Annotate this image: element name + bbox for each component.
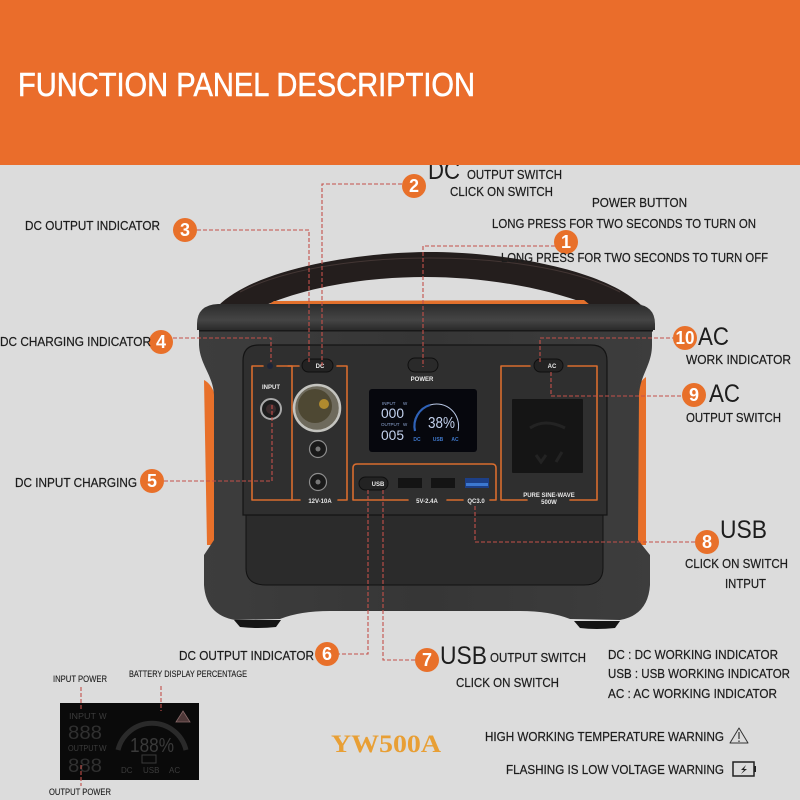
- LCD diagram segments: [68, 711, 190, 777]
- callout 9: AC output switch: OUTPUT SWITCH: [686, 411, 781, 425]
- LCD display: USB: [433, 437, 444, 443]
- callout 4: DC charging indicator: [0, 330, 173, 354]
- LCD diagram: [49, 669, 247, 798]
- USB switch: [359, 477, 388, 490]
- callout 1: power button: [492, 196, 768, 265]
- callout 8: USB click on switch: [685, 516, 788, 591]
- low voltage warning: FLASHING IS LOW VOLTAGE WARNING: [506, 763, 724, 777]
- callout 5: DC input charging: DC INPUT CHARGING: [15, 476, 137, 490]
- callout 1: power button: LONG PRESS FOR TWO SECONDS TO TURN ON: [492, 217, 756, 231]
- callout 6: DC output indicator: [179, 642, 339, 666]
- power button: POWER: [411, 377, 434, 383]
- orange side bumpers: [204, 377, 646, 545]
- callout 8: USB click on switch: 8: [702, 532, 712, 552]
- orange port outlines: [252, 366, 597, 500]
- DC round ports: 12V-10A: [308, 499, 332, 505]
- DC round ports: [308, 440, 332, 505]
- callout 1: power button: POWER BUTTON: [592, 196, 687, 210]
- LCD display: OUTPUT: [381, 422, 400, 427]
- upper control panel: [243, 345, 607, 515]
- callout 1: power button: 1: [561, 232, 571, 252]
- callout 6: DC output indicator: 6: [322, 644, 332, 664]
- callout 5: DC input charging: [15, 469, 164, 493]
- LCD display: INPUT: [382, 401, 396, 406]
- USB ports: [398, 478, 489, 505]
- LCD display: [369, 389, 477, 452]
- working indicator legend: DC : DC WORKING INDICATOR: [608, 648, 778, 662]
- top cap: [197, 304, 655, 330]
- callout 8: USB click on switch: USB: [720, 516, 767, 544]
- USB ports: 5V-2.4A: [416, 499, 439, 505]
- input indicator and port: [261, 363, 281, 419]
- callout 7: USB output switch: OUTPUT SWITCH: [490, 651, 586, 665]
- LCD diagram segments: 888: [68, 756, 102, 777]
- LCD diagram labels: INPUT POWER: [53, 674, 107, 685]
- lower blank panel: [246, 515, 603, 585]
- LCD diagram segments: AC: [169, 766, 180, 775]
- LCD diagram segments: W: [99, 712, 107, 721]
- callout 7: USB output switch: 7: [422, 650, 432, 670]
- body shell: [199, 320, 652, 620]
- LCD display: 38%: [428, 415, 455, 432]
- callout 2: DC output switch: [402, 168, 562, 199]
- callout 9: AC output switch: [682, 380, 781, 425]
- high temperature warning: HIGH WORKING TEMPERATURE WARNING: [485, 730, 724, 744]
- LCD diagram segments: INPUT: [69, 712, 96, 721]
- callout 2: DC output switch: 2: [409, 176, 419, 196]
- callout 4: DC charging indicator: 4: [156, 332, 166, 352]
- callout 2: DC output switch: CLICK ON SWITCH: [450, 185, 553, 199]
- LCD diagram segments: W: [99, 744, 107, 753]
- callout 8: USB click on switch: CLICK ON SWITCH: [685, 557, 788, 571]
- AC socket: 500W: [541, 500, 557, 506]
- title: FUNCTION PANEL DESCRIPTION: [18, 66, 475, 103]
- LCD display: 005: [381, 427, 404, 443]
- LCD diagram labels: BATTERY DISPLAY PERCENTAGE: [129, 669, 247, 680]
- DC big label: DC: [428, 157, 460, 185]
- callout 7: USB output switch: USB: [440, 642, 487, 670]
- cigarette socket: [294, 385, 340, 431]
- USB ports: QC3.0: [467, 499, 485, 505]
- callout 6: DC output indicator: DC OUTPUT INDICATOR: [179, 649, 314, 663]
- callout 7: USB output switch: [415, 642, 586, 690]
- callout 1: power button: LONG PRESS FOR TWO SECONDS TO TURN OFF: [501, 251, 768, 265]
- LCD diagram segments: DC: [121, 766, 133, 775]
- USB switch: USB: [372, 482, 385, 488]
- callout 9: AC output switch: AC: [709, 380, 740, 408]
- LCD diagram segments: 888: [68, 723, 102, 744]
- callout 9: AC output switch: 9: [689, 385, 699, 405]
- carry handle: [218, 252, 642, 306]
- callout 3: DC output indicator: DC OUTPUT INDICATOR: [25, 219, 160, 233]
- AC socket: [512, 399, 583, 506]
- callout 3: DC output indicator: [25, 218, 197, 242]
- callout 7: USB output switch: CLICK ON SWITCH: [456, 676, 559, 690]
- callout 4: DC charging indicator: DC CHARGING INDICATOR: [0, 335, 151, 349]
- LCD diagram segments: 188%: [130, 735, 174, 757]
- callout 3: DC output indicator: 3: [180, 220, 190, 240]
- LCD diagram labels: [49, 669, 247, 798]
- LCD display: DC: [413, 437, 421, 443]
- callout 10: AC work indicator: AC: [698, 323, 729, 351]
- callout 8: USB click on switch: INTPUT: [725, 577, 766, 591]
- input indicator and port: INPUT: [262, 385, 280, 391]
- model name: YW500A: [331, 731, 441, 758]
- power station product: [197, 252, 655, 629]
- header band: [0, 0, 800, 165]
- LCD diagram segments: OUTPUT: [68, 744, 98, 753]
- working indicator legend: USB : USB WORKING INDICATOR: [608, 667, 790, 681]
- working indicator legend: [608, 648, 790, 701]
- callout 10: AC work indicator: [673, 323, 791, 367]
- power button: [408, 358, 438, 383]
- callout 10: AC work indicator: 10: [676, 328, 694, 348]
- LCD display: W: [403, 422, 408, 427]
- callout 2: DC output switch: OUTPUT SWITCH: [467, 168, 562, 182]
- AC switch: [534, 359, 563, 372]
- leader lines: [164, 184, 695, 660]
- callout 10: AC work indicator: WORK INDICATOR: [686, 353, 791, 367]
- AC switch: AC: [548, 364, 557, 370]
- LCD display: AC: [451, 437, 459, 443]
- LCD display: W: [403, 401, 408, 406]
- working indicator legend: AC : AC WORKING INDICATOR: [608, 687, 777, 701]
- DC switch: DC: [316, 364, 325, 370]
- LCD diagram screen: [60, 703, 199, 780]
- callout 5: DC input charging: 5: [147, 471, 157, 491]
- feet: [234, 620, 620, 629]
- LCD diagram labels: OUTPUT POWER: [49, 787, 111, 798]
- DC switch: [302, 359, 333, 372]
- LCD diagram segments: USB: [143, 766, 159, 775]
- AC socket: PURE SINE-WAVE: [523, 493, 575, 499]
- LCD display: 000: [381, 405, 404, 421]
